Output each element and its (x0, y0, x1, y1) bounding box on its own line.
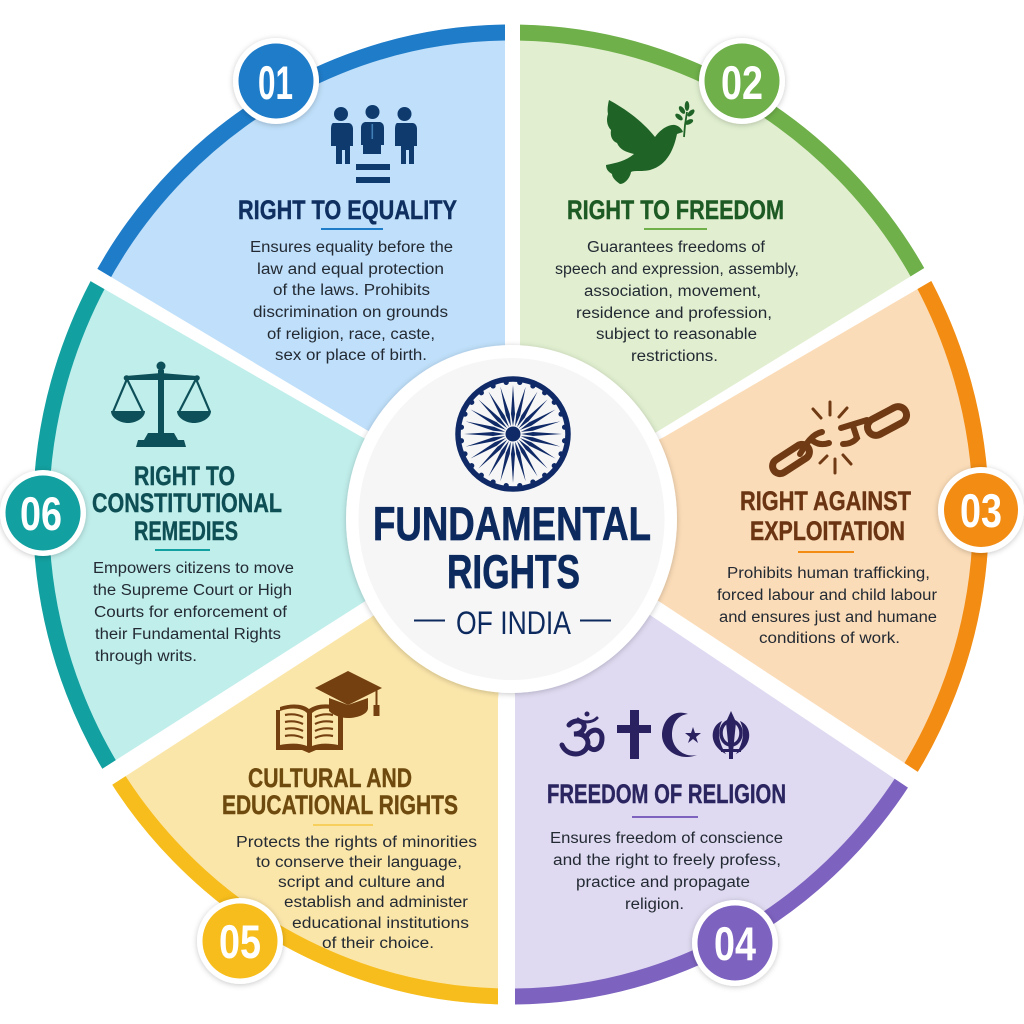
body text: subject to reasonable (596, 326, 757, 343)
icon: dove with olive branch (606, 100, 696, 184)
body text: speech and expression, assembly, (555, 261, 799, 278)
body text: law and equal protection (257, 261, 444, 278)
underline (155, 549, 210, 551)
heading: right against exploitation: RIGHT AGAINST (740, 486, 911, 516)
badge 01 (233, 38, 319, 124)
underline (644, 228, 707, 230)
body text (717, 565, 937, 647)
badge 02 (699, 38, 785, 124)
heading: right against exploitation (740, 486, 911, 546)
body text: residence and profession, (576, 305, 772, 322)
body text: Prohibits human trafficking, (727, 565, 930, 582)
underline (632, 816, 698, 818)
center hub (346, 345, 677, 693)
badge 03: 03 (960, 484, 1002, 537)
body text: of religion, race, caste, (267, 326, 435, 343)
body text: to conserve their language, (256, 854, 462, 871)
title (373, 497, 651, 598)
body text (250, 239, 453, 364)
heading: right to constitutional remedies: CONSTITUTIONAL (92, 488, 282, 518)
body text: conditions of work. (759, 630, 900, 647)
heading: right to constitutional remedies: RIGHT TO (134, 461, 235, 491)
body text: script and culture and (278, 874, 445, 891)
panel: right to constitutional remedies (34, 281, 366, 769)
heading: right to constitutional remedies (92, 461, 282, 546)
body text: forced labour and child labour (717, 587, 937, 604)
heading: right to freedom: RIGHT TO FREEDOM (567, 195, 784, 225)
body text: Ensures equality before the (250, 239, 453, 256)
segment background: green (520, 24, 924, 433)
body text: establish and administer (284, 894, 468, 911)
heading: right to constitutional remedies: REMEDIES (134, 516, 238, 546)
badge 04: 04 (714, 917, 756, 970)
heading: cultural and educational rights: CULTURAL AND (248, 763, 412, 793)
body text: the Supreme Court or High (93, 582, 292, 599)
body text: Ensures freedom of conscience (550, 830, 783, 847)
heading: cultural and educational rights (222, 763, 458, 820)
title: RIGHTS (447, 545, 580, 598)
icon: scales of justice (111, 362, 211, 447)
segment background: teal (34, 281, 366, 769)
subtitle: of india: OF INDIA (456, 605, 572, 641)
badge 02: 02 (721, 56, 763, 109)
body text: Courts for enforcement of (94, 604, 288, 621)
panel: cultural and educational rights (112, 615, 498, 1004)
heading: right against exploitation: EXPLOITATION (750, 516, 905, 546)
heading: right to equality: RIGHT TO EQUALITY (238, 195, 457, 225)
badge 06 (0, 470, 86, 556)
body text: practice and propagate (576, 874, 750, 891)
body text (93, 560, 294, 665)
icon: book and graduation cap (276, 671, 382, 753)
body text: association, movement, (584, 283, 761, 300)
body text: of the laws. Prohibits (273, 282, 430, 299)
heading: cultural and educational rights: EDUCATIONAL RIGHTS (222, 790, 458, 820)
body text: religion. (625, 896, 684, 913)
body text: their Fundamental Rights (95, 626, 281, 643)
panel: right against exploitation (658, 281, 988, 772)
underline (313, 824, 373, 826)
badge 05 (197, 898, 283, 984)
body text: Guarantees freedoms of (587, 239, 766, 256)
segment background: purple (515, 615, 908, 1004)
panel: right to equality (97, 24, 505, 431)
body text: educational institutions (292, 915, 469, 932)
icon: religious symbols (562, 710, 749, 759)
heading: freedom of religion: FREEDOM OF RELIGION (547, 779, 786, 809)
segment background: blue (97, 24, 505, 431)
body text: and ensures just and humane (719, 609, 937, 626)
body text (236, 834, 477, 952)
title: FUNDAMENTAL (373, 497, 651, 550)
underline (798, 551, 854, 553)
icon: three people and equals sign (331, 105, 417, 183)
icon: ashoka chakra (458, 379, 568, 489)
icon: crescent and star (662, 713, 701, 757)
panel: right to freedom (520, 24, 924, 433)
segment background: orange (658, 281, 988, 772)
body text: and the right to freely profess, (553, 852, 781, 869)
body text: discrimination on grounds (253, 304, 448, 321)
icon: broken chain (770, 402, 910, 476)
body text (555, 239, 799, 365)
underline (321, 228, 383, 230)
hub circle (346, 345, 677, 693)
badge 03 (938, 467, 1024, 553)
badge 01: 01 (258, 56, 293, 109)
body text (550, 830, 783, 913)
body text: through writs. (95, 648, 197, 665)
body text: restrictions. (631, 348, 718, 365)
icon: cross (617, 710, 651, 759)
badge 06: 06 (20, 487, 62, 540)
body text: Empowers citizens to move (93, 560, 294, 577)
segment background: yellow (112, 615, 498, 1004)
icon: khanda (713, 711, 749, 759)
body text: Protects the rights of minorities (236, 834, 477, 851)
badge 05: 05 (219, 915, 261, 968)
icon: om (562, 712, 602, 754)
badge 04 (692, 900, 778, 986)
body text: sex or place of birth. (275, 347, 427, 364)
body text: of their choice. (322, 935, 434, 952)
panel: freedom of religion (515, 615, 908, 1004)
